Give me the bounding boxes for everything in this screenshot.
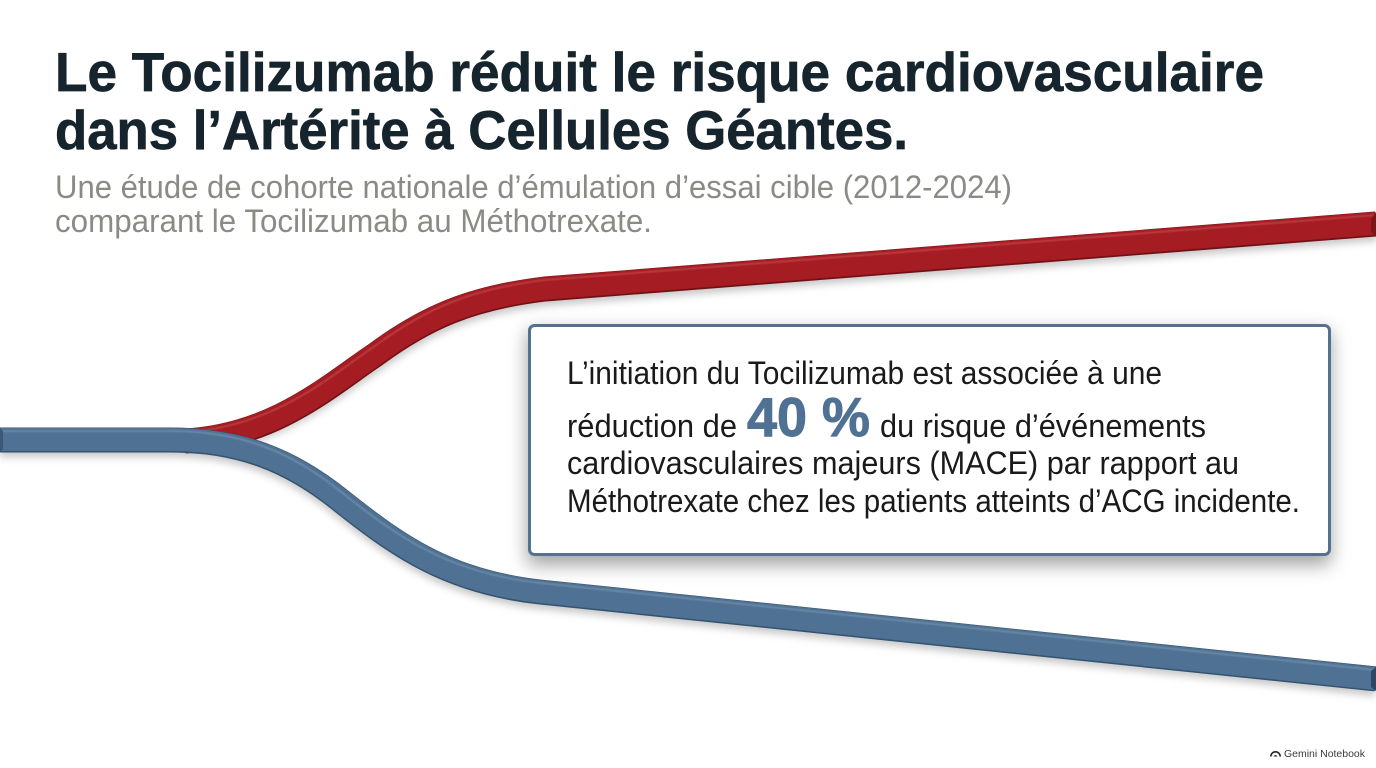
callout text: 40 % — [747, 386, 870, 448]
red ribbon: higher-risk path — [185, 212, 1376, 441]
callout text: Méthotrexate chez les patients atteints d’ACG incidente. — [567, 483, 1300, 519]
callout text: cardiovasculaires majeurs (MACE) par rapport au — [567, 445, 1239, 481]
title: Le Tocilizumab réduit le risque cardiovasculaire — [55, 41, 1264, 103]
callout text: du risque d’événements — [880, 408, 1206, 444]
title — [55, 41, 1264, 161]
blue ribbon: lower-risk path — [0, 428, 1376, 691]
callout box — [527, 326, 1331, 565]
callout text: réduction de — [567, 408, 737, 444]
watermark: Gemini Notebook: Gemini Notebook — [1284, 748, 1366, 760]
subtitle: Une étude de cohorte nationale d’émulation d’essai cible (2012-2024) — [55, 169, 1012, 205]
subtitle: comparant le Tocilizumab au Méthotrexate. — [55, 203, 652, 239]
subtitle — [55, 169, 1012, 239]
callout text: L’initiation du Tocilizumab est associée à une — [567, 355, 1162, 391]
callout text — [567, 355, 1300, 519]
title: dans l’Artérite à Cellules Géantes. — [55, 99, 908, 161]
